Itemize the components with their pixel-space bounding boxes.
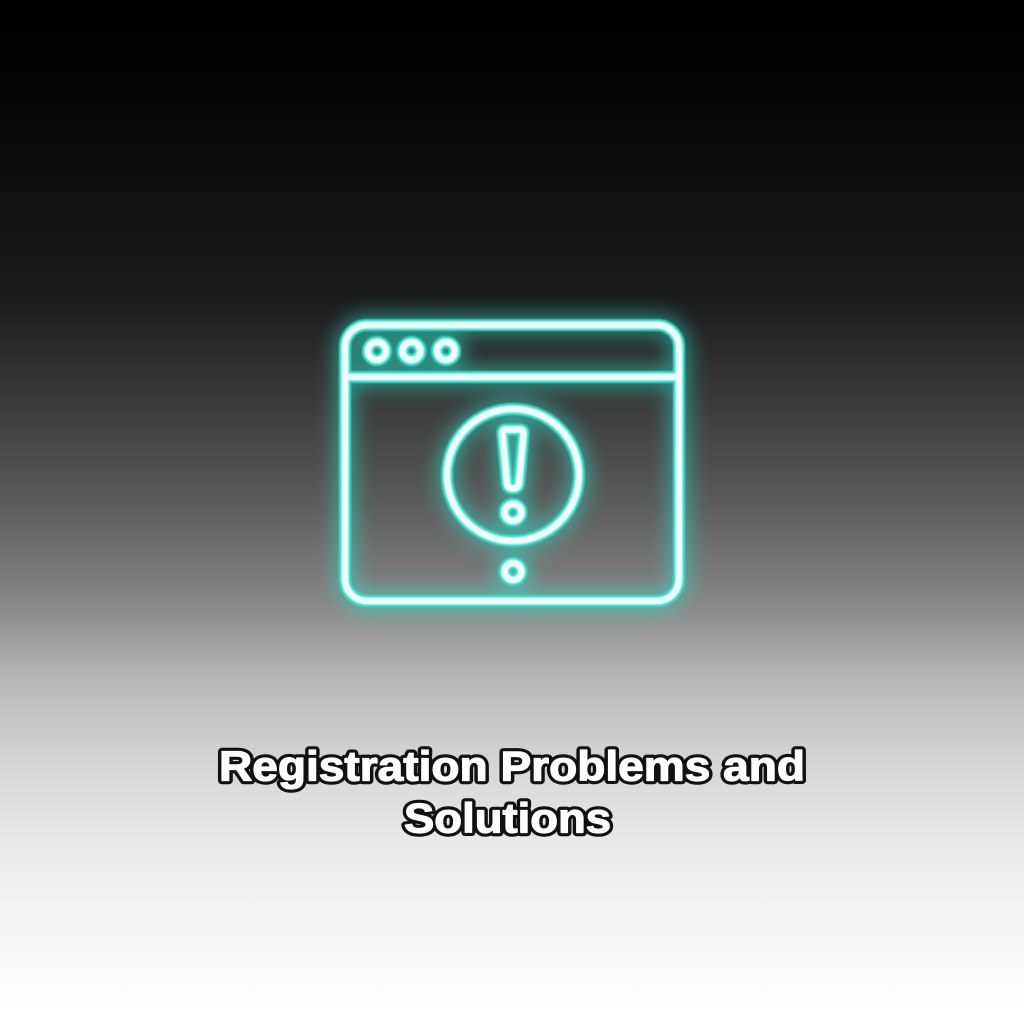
title: Solutions xyxy=(404,794,611,842)
title xyxy=(219,742,805,842)
title: Registration Problems and xyxy=(219,742,805,790)
title: Registration Problems and xyxy=(219,742,805,790)
title: Solutions xyxy=(404,794,611,842)
icon: neon browser window with warning symbol xyxy=(345,325,679,601)
